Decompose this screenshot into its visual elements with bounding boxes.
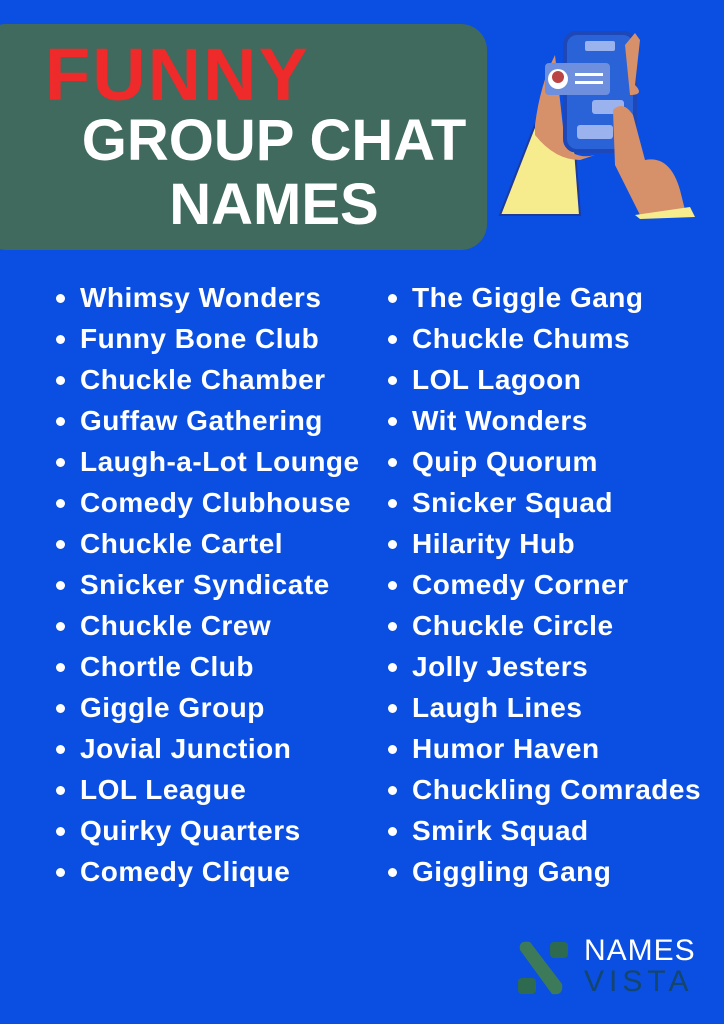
list: right column: The Giggle Gang: [412, 282, 644, 313]
list: right column: Quip Quorum: [412, 446, 598, 477]
illustration: hands holding phone: [498, 31, 695, 219]
list: right column: Chuckle Chums: [412, 323, 630, 354]
list: right column: Comedy Corner: [412, 569, 629, 600]
list: left column: Comedy Clique: [80, 856, 290, 887]
list: left column: Chuckle Chamber: [80, 364, 326, 395]
title panel: [0, 24, 487, 250]
list: left column: [56, 282, 360, 887]
logo: names vista: NAMES: [584, 934, 696, 967]
list: left column: Guffaw Gathering: [80, 405, 323, 436]
logo: names vista: VISTA: [584, 965, 693, 998]
title: names: NAMES: [169, 172, 379, 237]
list: left column: Quirky Quarters: [80, 815, 301, 846]
list: right column: Laugh Lines: [412, 692, 582, 723]
list: right column: Humor Haven: [412, 733, 600, 764]
list: right column: Snicker Squad: [412, 487, 613, 518]
list: left column: Giggle Group: [80, 692, 265, 723]
list: left column: Laugh-a-Lot Lounge: [80, 446, 360, 477]
list: left column: Comedy Clubhouse: [80, 487, 351, 518]
list: left column: LOL League: [80, 774, 246, 805]
list: left column: Jovial Junction: [80, 733, 291, 764]
list: right column: LOL Lagoon: [412, 364, 581, 395]
logo: names vista: [518, 934, 696, 998]
list: left column: Chuckle Cartel: [80, 528, 283, 559]
list: left column: Chortle Club: [80, 651, 254, 682]
list: left column: Funny Bone Club: [80, 323, 319, 354]
list: left column: Snicker Syndicate: [80, 569, 330, 600]
list: left column: Whimsy Wonders: [80, 282, 321, 313]
list: left column: Chuckle Crew: [80, 610, 271, 641]
list: right column: [388, 282, 701, 887]
title: funny: FUNNY: [45, 33, 310, 116]
title: group chat: GROUP CHAT: [82, 108, 466, 173]
list: right column: Smirk Squad: [412, 815, 589, 846]
list: right column: Wit Wonders: [412, 405, 588, 436]
list: right column: Giggling Gang: [412, 856, 611, 887]
list: right column: Chuckling Comrades: [412, 774, 701, 805]
list: right column: Jolly Jesters: [412, 651, 588, 682]
list: right column: Hilarity Hub: [412, 528, 575, 559]
list: right column: Chuckle Circle: [412, 610, 614, 641]
